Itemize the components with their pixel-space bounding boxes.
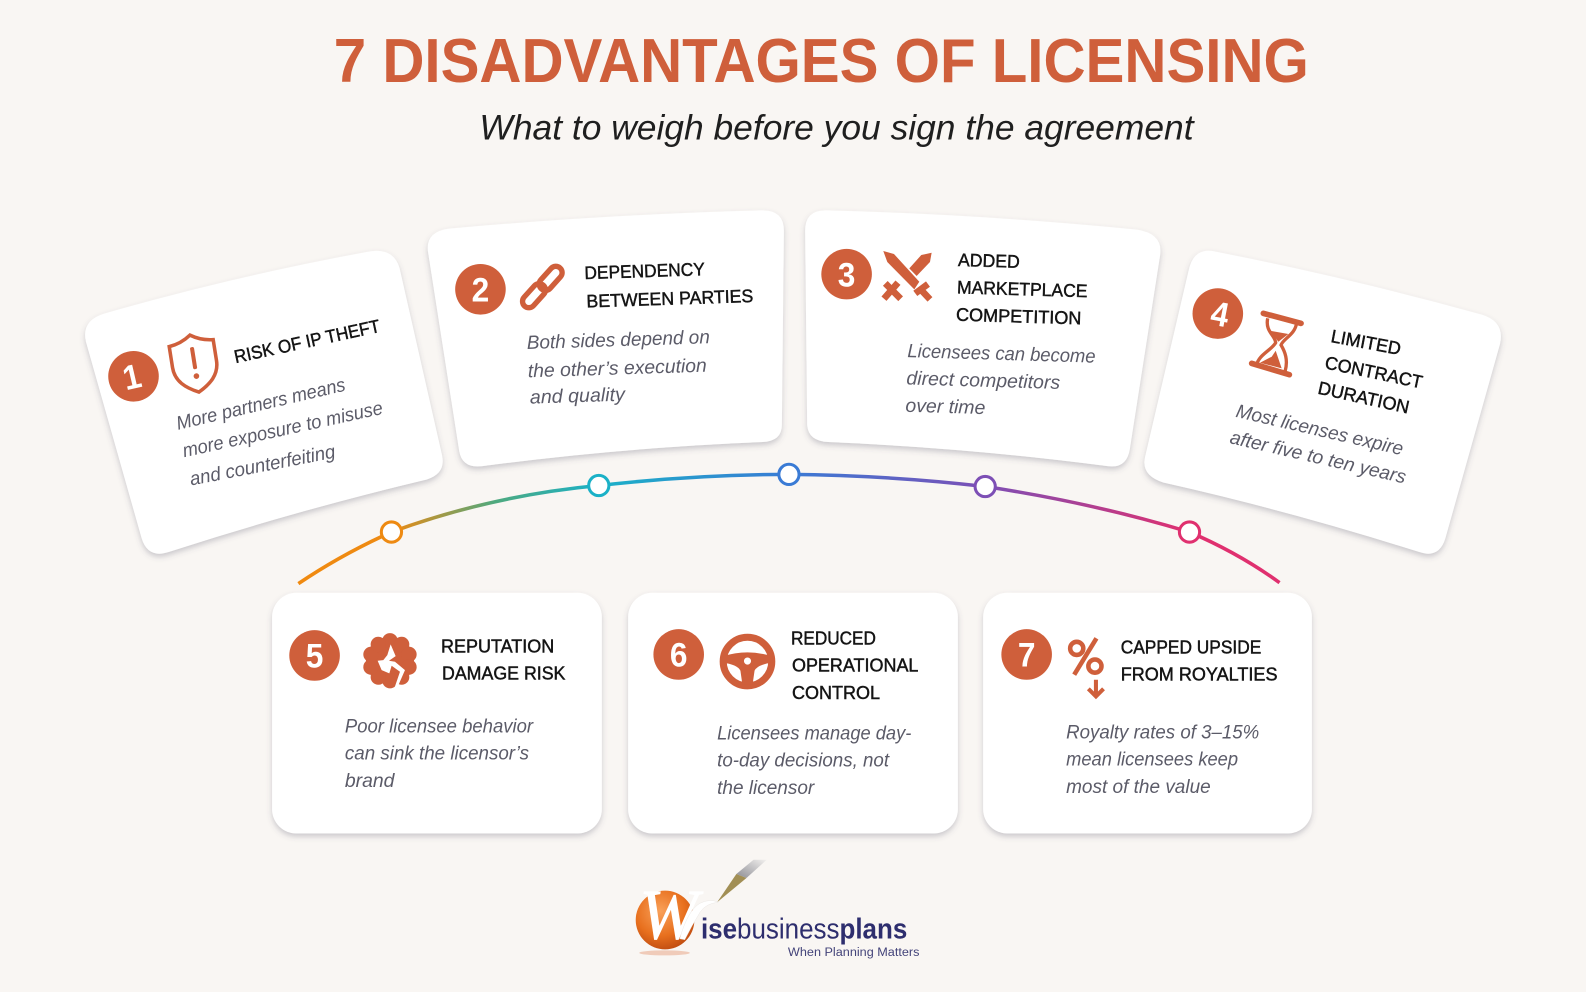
heading: CONTROL	[792, 683, 880, 703]
description: Royalty rates of 3–15%	[1066, 722, 1259, 743]
description: more exposure to misuse	[181, 398, 385, 462]
heading: REDUCED	[791, 628, 876, 648]
description: brand	[345, 771, 396, 792]
description: Poor licensee behavior	[345, 716, 535, 737]
description	[174, 375, 385, 490]
description: over time	[905, 396, 986, 419]
heading	[441, 636, 565, 684]
heading: DAMAGE RISK	[442, 664, 565, 684]
icon: steering wheel	[722, 637, 773, 686]
description: Both sides depend on	[526, 327, 710, 354]
heading	[956, 250, 1088, 328]
timeline arc with nodes	[298, 464, 1280, 584]
heading	[1316, 326, 1424, 418]
icon: crossed swords	[883, 251, 932, 299]
description: direct competitors	[906, 368, 1061, 394]
description	[717, 723, 911, 799]
panel: card 4 limited contract duration	[1144, 251, 1501, 554]
heading	[791, 628, 918, 703]
number badge 4: 4	[1208, 294, 1233, 336]
subtitle: What to weigh before you sign the agreement	[479, 108, 1196, 148]
description: Most licenses expire	[1234, 401, 1405, 460]
panel: card 7 capped upside from royalties	[983, 593, 1312, 833]
title: 7 DISADVANTAGES OF LICENSING	[334, 27, 1309, 96]
icon: chain link	[520, 264, 565, 310]
description	[905, 341, 1096, 419]
number badge 3: 3	[838, 256, 855, 295]
heading	[584, 259, 754, 312]
description	[1228, 401, 1408, 489]
number badge 1: 1	[119, 357, 145, 399]
panel: card 6 reduced operational control	[628, 593, 958, 833]
icon: percent with down arrow	[1070, 638, 1104, 696]
heading: ADDED	[958, 250, 1020, 272]
heading: COMPETITION	[956, 305, 1082, 328]
heading: DEPENDENCY	[584, 259, 705, 283]
description: the other’s execution	[527, 356, 707, 382]
heading: CONTRACT	[1323, 353, 1424, 392]
number badge 6	[653, 629, 704, 680]
logo: Wise Business Plans	[636, 860, 919, 959]
heading: CAPPED UPSIDE	[1121, 637, 1261, 657]
number badge 7	[1001, 629, 1052, 680]
heading: BETWEEN PARTIES	[586, 286, 754, 312]
number badge 2: 2	[472, 271, 489, 310]
number badge 3	[821, 249, 872, 299]
panel: card 1 risk of IP theft	[85, 251, 443, 554]
panel: card 3 added marketplace competition	[805, 210, 1160, 467]
heading: MARKETPLACE	[957, 277, 1088, 301]
panel: card 5 reputation damage risk	[272, 593, 602, 833]
logo W mark: W	[639, 877, 704, 955]
logo tagline: When Planning Matters	[788, 945, 919, 959]
heading	[1121, 637, 1277, 685]
description: More partners means	[174, 375, 348, 435]
description: the licensor	[717, 778, 816, 799]
number badge 7: 7	[1018, 636, 1035, 675]
description	[526, 327, 710, 409]
heading: RISK OF IP THEFT	[232, 316, 382, 367]
description: and counterfeiting	[188, 442, 337, 490]
logo wordmark: isebusinessplans	[701, 914, 907, 946]
description: after five to ten years	[1228, 427, 1408, 489]
description	[1066, 722, 1259, 798]
description: mean licensees keep	[1066, 750, 1238, 771]
icon: cracked badge	[363, 633, 417, 689]
number badge 2	[455, 264, 506, 315]
description: to-day decisions, not	[717, 751, 890, 772]
panel: card 2 dependency between parties	[428, 210, 784, 467]
logo pen	[717, 860, 767, 902]
heading: FROM ROYALTIES	[1121, 665, 1277, 685]
icon: hourglass	[1252, 313, 1301, 375]
number badge 5: 5	[306, 637, 323, 676]
heading: REPUTATION	[441, 636, 554, 656]
description: Licensees can become	[907, 341, 1096, 368]
heading: DURATION	[1316, 378, 1411, 418]
number badge 5	[289, 630, 340, 681]
logo orb	[636, 891, 694, 955]
number badge 6: 6	[670, 636, 687, 675]
heading: OPERATIONAL	[792, 656, 918, 676]
number badge 1	[108, 351, 159, 402]
description: and quality	[530, 385, 627, 409]
description: can sink the licensor’s	[345, 744, 529, 765]
heading: LIMITED	[1329, 326, 1403, 359]
number badge 4	[1193, 288, 1243, 339]
icon: shield with exclamation	[168, 332, 221, 396]
description	[345, 716, 535, 792]
description: most of the value	[1066, 777, 1211, 798]
description: Licensees manage day-	[717, 723, 911, 744]
